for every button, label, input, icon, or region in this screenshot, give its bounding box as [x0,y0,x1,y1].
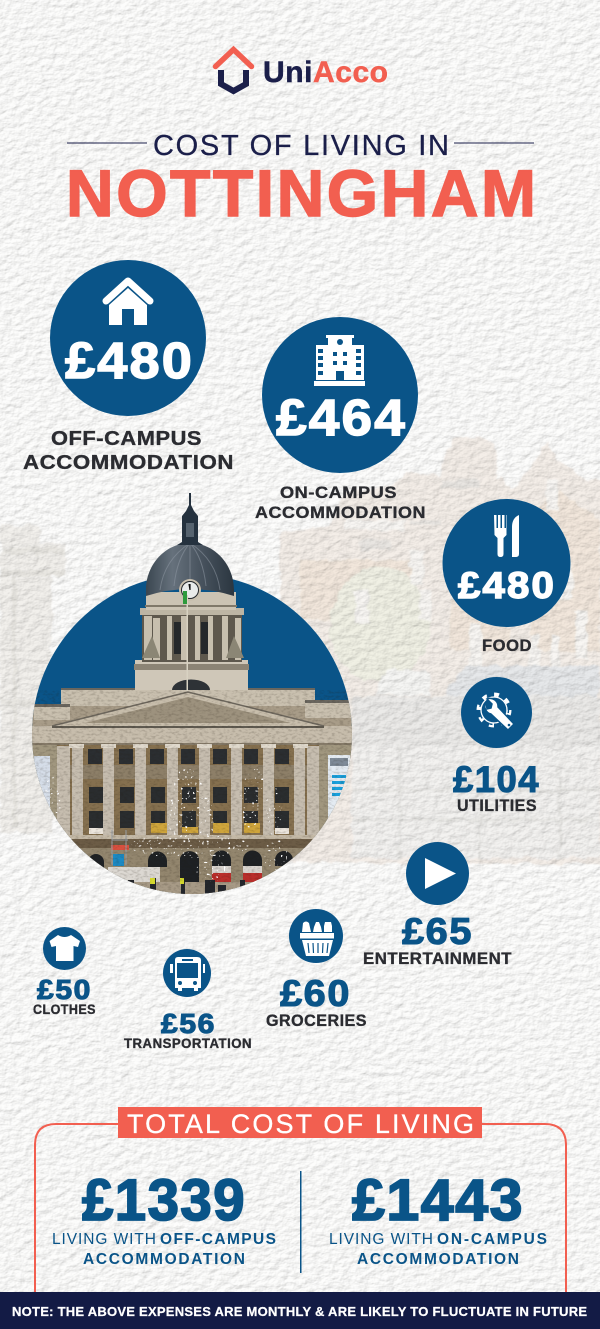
item: utilities [453,677,540,815]
photo: Nottingham council house in blue circle [30,493,355,896]
divider [300,1171,302,1273]
faded windows [345,480,587,680]
label: UTILITIES [457,797,537,815]
panel heading: TOTAL COST OF LIVING [127,1109,474,1139]
flag and pole [186,595,188,691]
amount: £50 [37,974,92,1005]
circle [442,499,570,627]
building lower facade [30,688,355,896]
item: clothes [33,927,96,1017]
dome [146,543,234,596]
title city name: NOTTINGHAM [66,156,536,230]
amount: £65 [402,911,473,952]
icon: play [425,858,456,889]
dome and tower [134,493,249,691]
amount: £464 [276,389,407,446]
title small: COST OF LIVING IN [153,130,449,162]
amount: £480 [458,565,556,606]
faded awning [445,666,600,696]
blue circle [32,574,352,894]
footer note bar [0,1292,600,1329]
tower base [135,660,248,690]
label: CLOTHES [33,1002,96,1017]
balloons [43,768,287,882]
colonnade [142,612,242,662]
amount: £56 [161,1008,216,1039]
icon: t-shirt [50,935,80,961]
panel: total cost of living [35,1107,566,1295]
label line two: ACCOMMODATION [23,452,234,474]
label line two: ACCOMMODATION [255,504,426,522]
entablature [32,726,352,744]
columns [57,746,319,836]
label: ON-CAMPUS [280,484,397,502]
gold banners [151,823,260,833]
label: OFF-CAMPUS [51,428,202,450]
icon: gear and wrench [478,694,514,730]
title [66,130,536,230]
off-campus caption: LIVING WITH [52,1231,156,1248]
faded left building [0,525,65,833]
label: GROCERIES [266,1012,367,1030]
amount: £60 [280,973,351,1014]
scaffold [112,830,128,865]
title line right [454,142,534,144]
facade recess [57,745,319,837]
note text: NOTE: THE ABOVE EXPENSES ARE MONTHLY & ARE LIKELY TO FLUCTUATE IN FUTURE [12,1304,587,1319]
logo wordmark: UniAcco [263,56,388,89]
frieze [57,765,319,779]
faded background photo of city buildings [0,436,600,864]
item: on-campus accommodation [255,317,426,522]
circle [50,260,206,416]
circle [262,317,418,473]
ground floor [68,836,316,894]
icon: fork and knife [494,515,519,557]
photo grain [30,690,355,896]
panel heading box [118,1107,482,1138]
upper windows [88,749,289,764]
bar [0,1292,600,1329]
faded brick building [280,436,600,864]
lantern [177,493,203,545]
lower windows [89,811,289,828]
amount: £480 [65,332,194,389]
item: entertainment [363,842,512,968]
circle [289,909,343,963]
faded street [352,696,600,746]
panel border [35,1124,566,1295]
on-campus caption: LIVING WITH [329,1231,433,1248]
on-campus caption: ON-CAMPUS [437,1231,547,1248]
drum [146,592,236,610]
circle [43,927,86,970]
crowd [128,878,245,894]
middle windows [89,787,289,803]
pediment [56,706,320,726]
item: groceries [266,909,367,1030]
title line left [67,142,147,144]
circle [406,842,469,905]
off-campus caption line two: ACCOMMODATION [83,1251,245,1268]
item: food [442,499,570,655]
on-campus caption line two: ACCOMMODATION [357,1251,519,1268]
circle [461,677,532,748]
logo mark [216,50,252,91]
clock [179,579,201,601]
off-campus total: £1339 [82,1168,246,1233]
icon: building [314,335,365,386]
label: TRANSPORTATION [124,1036,252,1051]
posters [34,756,50,808]
circle [163,949,211,997]
label: FOOD [482,637,532,655]
label: ENTERTAINMENT [363,950,512,968]
amount: £104 [453,759,540,800]
faded tree [330,567,430,683]
logo [216,50,388,91]
item: transportation [124,949,252,1051]
off-campus caption: OFF-CAMPUS [160,1231,276,1248]
on-campus total: £1443 [352,1168,524,1233]
item: off-campus accommodation [23,260,234,474]
icon: house [106,281,150,325]
icon: basket [300,922,334,956]
icon: bus [170,957,205,991]
